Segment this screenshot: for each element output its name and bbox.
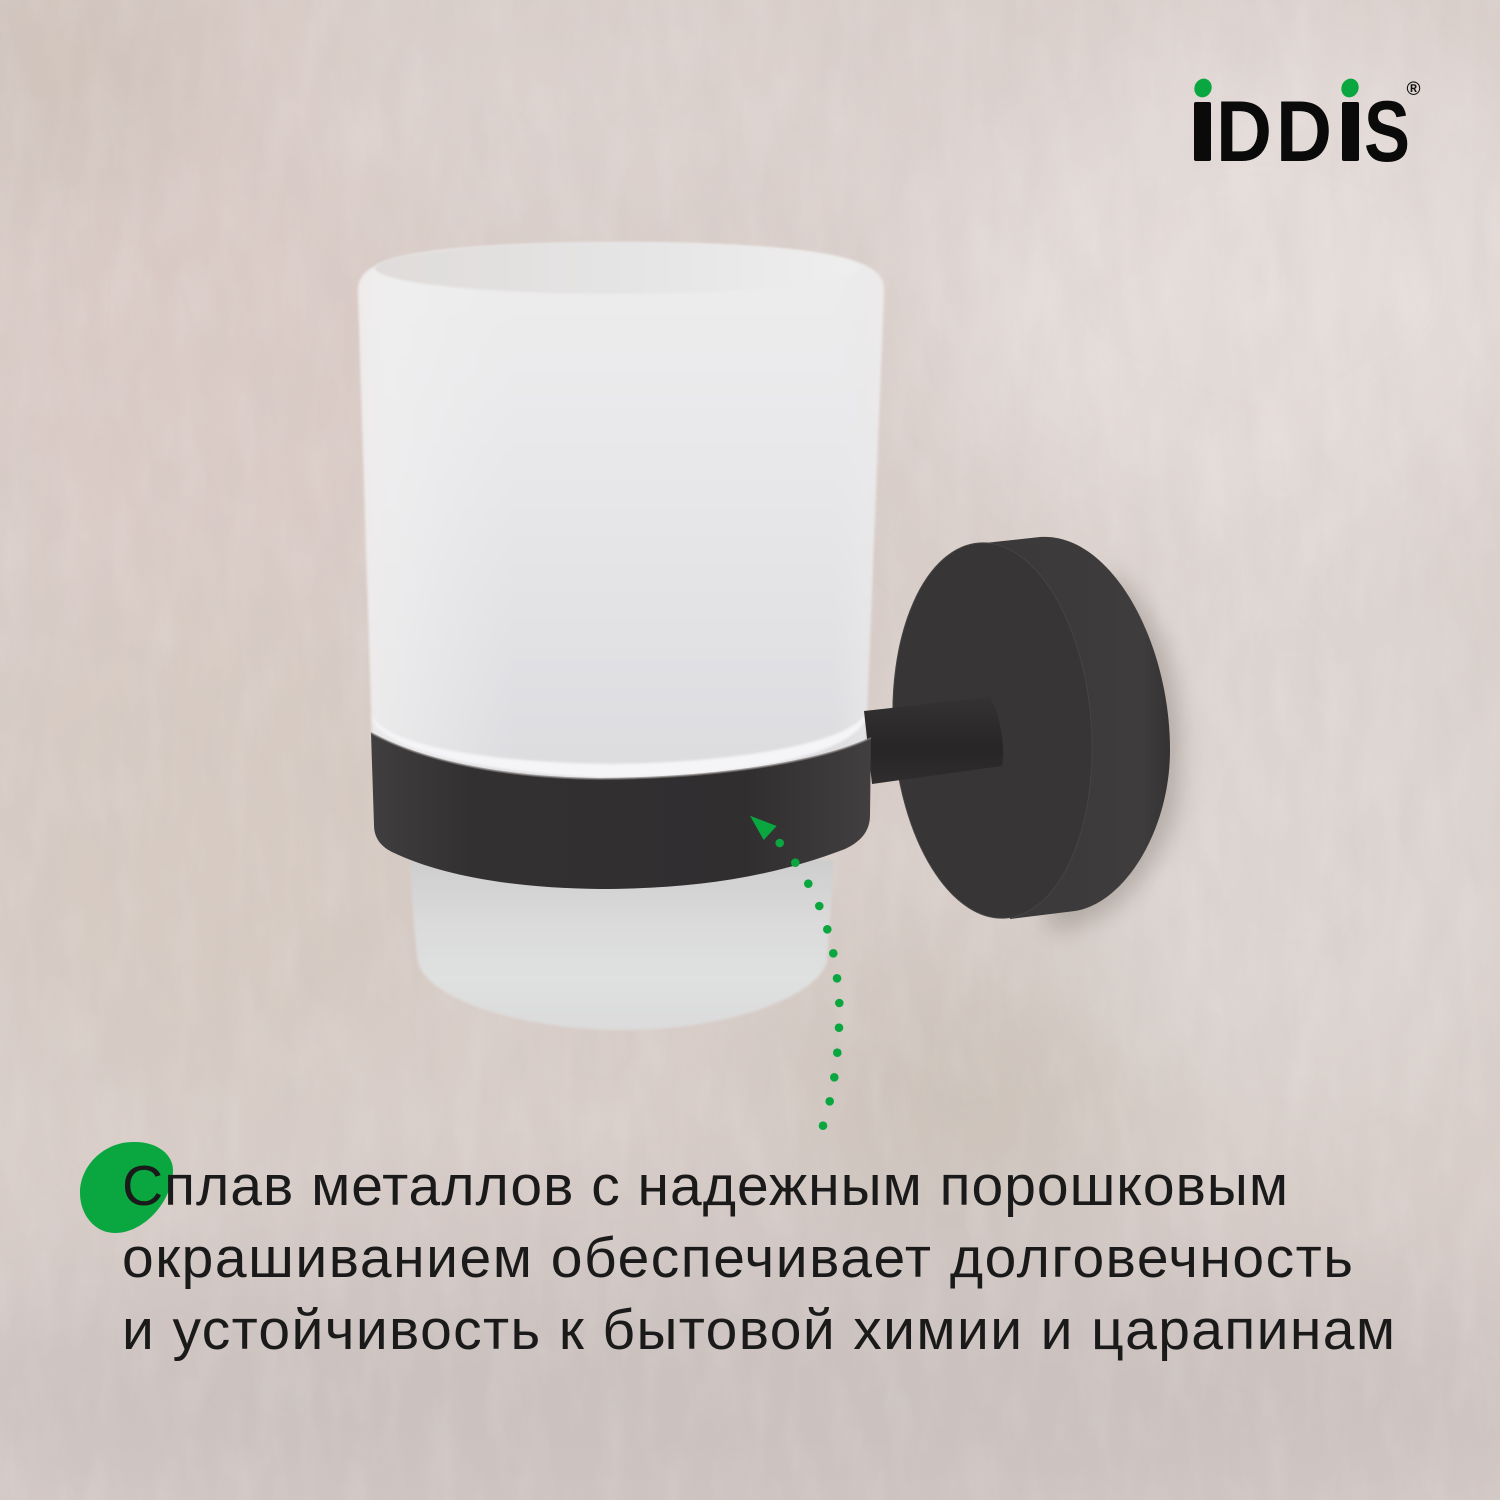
logo letters: D [1276,84,1332,180]
dotted trail [775,839,844,1130]
caption text: Сплав металлов с надежным порошковым [122,1154,1288,1218]
glass rim opening [375,242,859,294]
green accent blob [80,1142,173,1233]
logo letters: D [1216,84,1272,180]
arm [864,697,1003,784]
lower part of glass [410,860,834,1030]
caption text: окрашиванием обеспечивает долговечность [122,1226,1353,1290]
logo green dots [1191,76,1362,100]
caption text: и устойчивость к бытовой химии и царапинам [122,1298,1395,1362]
logo letters [1194,84,1410,180]
round wall plate [881,536,1170,925]
registered mark: ® [1406,79,1420,100]
logo letters: S [1364,84,1410,180]
caption text [122,1154,1395,1362]
main glass body [358,242,884,790]
arrow head [750,816,777,840]
arrow: dotted green pointer [750,816,844,1130]
logo: IDDIS [1191,76,1420,180]
black ring holder [371,733,871,889]
wall mount shadow [1040,570,1181,932]
product: wall-mounted glass holder [358,242,1181,1030]
white seat ring [372,710,867,778]
